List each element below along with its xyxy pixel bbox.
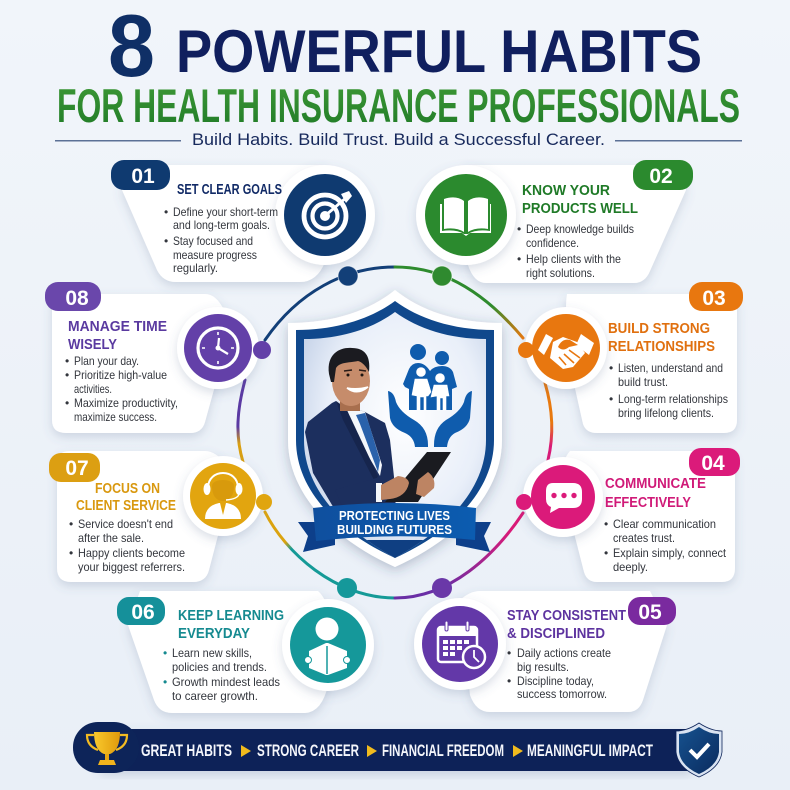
panel: habit 03: • (609, 361, 613, 375)
panel: habit 03: RELATIONSHIPS (608, 339, 715, 355)
panel: habit 03: build trust. (618, 375, 668, 389)
icon: trophy (87, 732, 127, 765)
subtitle: Build Habits. Build Trust. Build a Successful Career. (192, 130, 605, 149)
panel: habit 06: policies and trends. (172, 660, 267, 674)
panel: habit 08: WISELY (68, 337, 117, 353)
panel: habit 04: creates trust. (613, 531, 675, 545)
panel: habit 04: Clear communication (613, 517, 716, 531)
panel: habit 02: 02 (649, 165, 673, 188)
panel: habit 03: 03 (702, 287, 726, 310)
panel: habit 06: • (163, 675, 167, 689)
icon: family in hands (388, 344, 472, 447)
panel: habit 07: FOCUS ON (95, 481, 160, 497)
panel: habit 07: after the sale. (78, 531, 144, 545)
title: POWERFUL HABITS (176, 18, 702, 85)
panel: habit 05: Daily actions create (517, 646, 611, 660)
panel: habit 01: and long-term goals. (173, 218, 270, 232)
panel: habit 02: PRODUCTS WELL (522, 201, 638, 217)
panel: habit 03: Listen, understand and (618, 361, 723, 375)
panel: habit 06: Learn new skills, (172, 646, 252, 660)
panel: habit 05: success tomorrow. (517, 687, 607, 701)
panel: habit 03: BUILD STRONG (608, 321, 710, 337)
panel: habit 07: • (69, 517, 73, 531)
panel: habit 01: Define your short-term (173, 205, 278, 219)
panel: habit 04: • (604, 517, 608, 531)
panel: habit 04: EFFECTIVELY (605, 495, 691, 511)
panel: habit 05: Discipline today, (517, 674, 594, 688)
panel: habit 02: confidence. (526, 236, 579, 250)
panel: habit 06: to career growth. (172, 689, 258, 703)
panel: habit 05: STAY CONSISTENT (507, 608, 626, 624)
panel: habit 04: deeply. (613, 560, 648, 574)
panel: habit 08: • (65, 396, 69, 410)
panel: habit 01: 01 (131, 165, 155, 188)
panel: habit 04: Explain simply, connect (613, 546, 727, 560)
panel: habit 08: • (65, 368, 69, 382)
panel: habit 05: & DISCIPLINED (507, 626, 605, 642)
panel: habit 01: • (164, 205, 168, 219)
footer banner: MEANINGFUL IMPACT (527, 741, 653, 760)
panel: habit 05 (414, 591, 676, 712)
panel: habit 03: bring lifelong clients. (618, 406, 714, 420)
title (57, 0, 740, 132)
panel: habit 03: Long-term relationships (618, 392, 728, 406)
panel: habit 06: KEEP LEARNING (178, 608, 284, 624)
panel: habit 02: Deep knowledge builds (526, 222, 634, 236)
panel: habit 05: • (507, 646, 511, 660)
icon: calendar with clock (438, 621, 485, 668)
panel: habit 07: • (69, 546, 73, 560)
panel: habit 02: right solutions. (526, 266, 595, 280)
panel: habit 04 (523, 448, 740, 582)
panel: habit 08: Prioritize high-value (74, 368, 167, 382)
panel: habit 07: 07 (65, 457, 89, 480)
panel: habit 02: • (517, 222, 521, 236)
panel: habit 02: • (517, 252, 521, 266)
footer banner: FINANCIAL FREEDOM (382, 741, 504, 760)
connecting ring (238, 267, 552, 598)
panel: habit 06: • (163, 646, 167, 660)
panel: habit 01 (111, 160, 375, 282)
panel: habit 04: • (604, 546, 608, 560)
icon: target (304, 191, 352, 237)
panel: habit 08: 08 (65, 287, 89, 310)
panel: habit 02 (416, 160, 693, 283)
panel: habit 05: big results. (517, 660, 569, 674)
panel: habit 01: SET CLEAR GOALS (177, 182, 282, 198)
panel: habit 01: regularly. (173, 261, 218, 275)
banner: protecting lives building futures (298, 503, 491, 552)
panel: habit 07 (49, 451, 263, 582)
panel: habit 04: COMMUNICATE (605, 476, 706, 492)
panel: habit 08: • (65, 354, 69, 368)
icon: clock (198, 328, 238, 368)
footer banner (73, 722, 722, 777)
banner: protecting lives building futures: PROTECTING LIVES (339, 509, 450, 523)
footer banner: GREAT HABITS (141, 741, 232, 760)
panel: habit 08: maximize success. (74, 410, 157, 424)
icon: person reading (304, 618, 350, 675)
panel: habit 02: Help clients with the (526, 252, 621, 266)
icon: handshake (538, 334, 594, 369)
panel: habit 06: EVERYDAY (178, 626, 250, 642)
panel: habit 01: measure progress (173, 248, 257, 262)
panel: habit 05: 05 (638, 601, 662, 624)
panel: habit 08: Plan your day. (74, 354, 139, 368)
person: insurance professional (305, 348, 451, 560)
panel: habit 08: activities. (74, 382, 112, 396)
panel: habit 02: KNOW YOUR (522, 183, 610, 199)
panel: habit 07: CLIENT SERVICE (76, 498, 176, 514)
icon: headset agent (204, 473, 242, 519)
panel: habit 03 (525, 282, 743, 433)
icon: chat bubble (546, 483, 582, 513)
banner: protecting lives building futures: BUILDING FUTURES (337, 523, 452, 537)
panel: habit 07: Happy clients become (78, 546, 185, 560)
panel: habit 06: Growth mindest leads (172, 675, 280, 689)
panel: habit 07: your biggest referrers. (78, 560, 185, 574)
panel: habit 06 (117, 591, 374, 713)
icon: shield with check (676, 723, 722, 777)
footer banner: STRONG CAREER (257, 741, 359, 760)
panel: habit 08 (45, 282, 259, 433)
panel: habit 03: • (609, 392, 613, 406)
panel: habit 08: Maximize productivity, (74, 396, 178, 410)
panel: habit 04: 04 (701, 452, 725, 475)
panel: habit 01: Stay focused and (173, 234, 253, 248)
panel: habit 05: • (507, 674, 511, 688)
icon: open book (440, 197, 491, 236)
panel: habit 01: • (164, 234, 168, 248)
panel: habit 07: Service doesn't end (78, 517, 173, 531)
central shield (288, 290, 502, 567)
panel: habit 06: 06 (131, 601, 155, 624)
ring nodes (253, 266, 534, 598)
panel: habit 08: MANAGE TIME (68, 319, 167, 335)
